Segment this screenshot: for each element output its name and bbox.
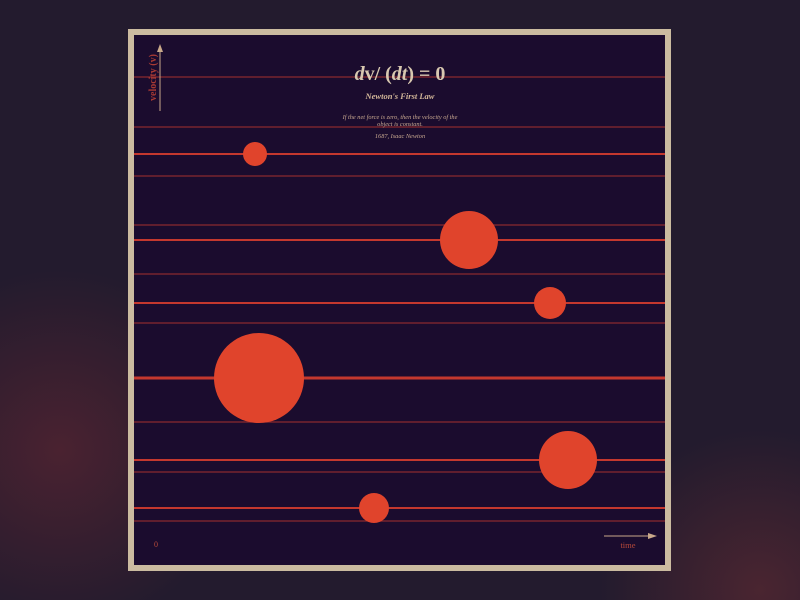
poster panel	[134, 35, 665, 565]
velocity axis	[148, 44, 163, 111]
title: dv/ (dt) = 0	[355, 63, 445, 85]
poster panel: object is constant.	[377, 121, 423, 128]
time axis: time	[620, 540, 636, 550]
velocity axis: velocity (v)	[148, 54, 159, 101]
subtitle: Newton's First Law	[365, 91, 435, 101]
origin label: 0	[154, 540, 158, 549]
attribution: 1687, Isaac Newton	[375, 133, 425, 140]
poster frame	[128, 29, 671, 571]
time axis	[604, 533, 657, 550]
balls	[214, 142, 597, 523]
description: If the net force is zero, then the velocity of the	[342, 114, 458, 121]
